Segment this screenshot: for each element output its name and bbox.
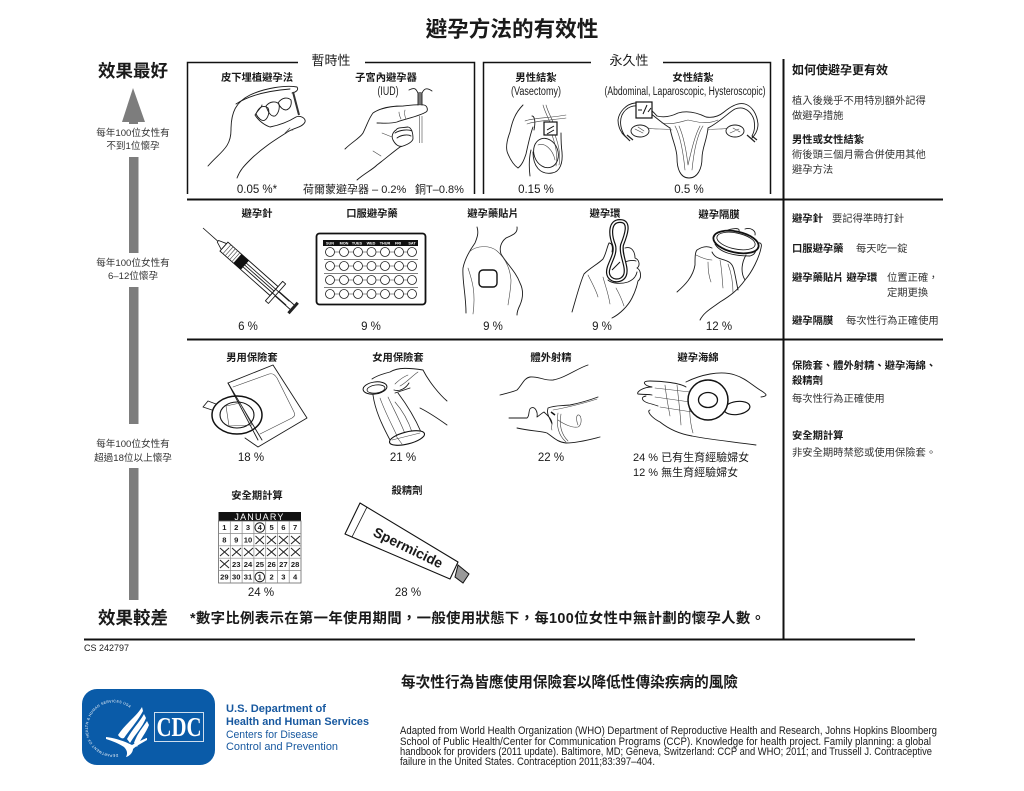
icon: hand holding vaginal ring <box>572 221 641 318</box>
method: fertility awareness: 安全期計算 <box>231 489 283 502</box>
icon: syringe <box>194 218 303 319</box>
advice: sterilization: 避孕方法 <box>792 163 833 176</box>
icon: male anatomy with cut vas <box>507 105 566 176</box>
advice: sterilization: 術後頭三個月需合併使用其他 <box>792 148 926 161</box>
advice: implant: 做避孕措施 <box>792 109 843 122</box>
method: implant <box>208 71 305 196</box>
message: condom use: 每次性行為皆應使用保險套以降低性傳染疾病的風險 <box>401 673 738 691</box>
method: male condom: 18 % <box>238 452 264 464</box>
icon: shoulder with patch <box>463 227 523 315</box>
rates: sponge parous and nulliparous: 12 % 無生育經驗婦女 <box>633 465 738 479</box>
advice: implant <box>792 94 926 122</box>
label: middle tier rate: 每年100位女性有 <box>96 257 170 269</box>
label: bottom tier rate: 每年100位女性有 <box>96 438 170 450</box>
method: spermicide: 殺精劑 <box>392 484 422 497</box>
calendar numbers: 4 <box>293 573 298 582</box>
calendar numbers: 10 <box>244 535 252 544</box>
advice: diaphragm <box>792 314 939 327</box>
icon: calendar <box>218 512 301 583</box>
icon: condom and wrapper <box>203 365 307 447</box>
footnote: *數字比例表示在第一年使用期間，一般使用狀態下，每100位女性中無計劃的懷孕人數。 <box>190 609 765 627</box>
rates: hormonal and copper IUD: 銅T–0.8% <box>415 182 464 196</box>
rates: sponge parous and nulliparous: 24 % 已有生育經驗婦女 <box>633 450 749 464</box>
heading: permanent: 永久性 <box>609 53 649 68</box>
advice: injection <box>792 212 904 225</box>
method: withdrawal: 22 % <box>538 452 564 464</box>
advice: sterilization <box>792 133 926 176</box>
icon: pill pack: FRI <box>395 242 401 246</box>
method: tubal sterilization: (Abdominal, Laparoscopic, Hysteroscopic) <box>604 86 766 98</box>
method: diaphragm: 12 % <box>706 321 732 333</box>
label: top tier rate <box>96 127 170 152</box>
source citation: failure in the United States. Contraception 2011;83:397–404. <box>400 756 655 768</box>
icon: hand holding IUD <box>345 89 432 180</box>
panel frame lines <box>84 59 943 640</box>
method: vasectomy: 0.15 % <box>518 184 554 196</box>
method: implant: 0.05 %* <box>237 184 278 196</box>
icon: spermicide tube: Spermicide <box>371 524 446 571</box>
calendar numbers: 1 <box>258 573 263 582</box>
calendar numbers: 1 <box>222 523 227 532</box>
calendar numbers: 6 <box>281 523 286 532</box>
method: diaphragm: 避孕隔膜 <box>698 208 740 221</box>
calendar numbers: 9 <box>234 535 238 544</box>
calendar numbers: 28 <box>291 560 299 569</box>
calendar numbers: 30 <box>232 573 240 582</box>
source citation: handbook for providers (2011 update). Baltimore, MD; Geneva, Switzerland: CCP and WHO; 2011; and Trussell J. Contraceptive <box>400 746 932 758</box>
icon: withdrawal diagram <box>500 365 600 443</box>
advice: pill: 每天吃一錠 <box>856 242 907 255</box>
source citation: Adapted from World Health Organization (WHO) Department of Reproductive Health and Research, Johns Hopkins Bloomberg <box>400 725 937 737</box>
method: ring: 9 % <box>592 321 612 333</box>
method: tubal sterilization <box>604 71 766 196</box>
advice: patch and ring: 定期更換 <box>887 286 928 299</box>
advice: patch and ring: 避孕藥貼片 避孕環 <box>792 271 878 284</box>
advice: pill: 口服避孕藥 <box>792 242 843 255</box>
calendar numbers: 3 <box>246 523 250 532</box>
calendar numbers: 27 <box>279 560 288 569</box>
icon: hand holding sponge <box>638 373 766 445</box>
label: bottom tier rate: 超過18位以上懷孕 <box>94 452 172 464</box>
heading: temporary: 暫時性 <box>311 53 351 68</box>
calendar numbers: 23 <box>232 560 240 569</box>
agency name: Control and Prevention <box>226 741 338 753</box>
method: injection: 6 % <box>238 321 258 333</box>
method: withdrawal <box>500 351 600 464</box>
advice: patch and ring <box>792 271 938 299</box>
advice: barrier methods <box>792 359 936 405</box>
CDC box: CDC <box>156 712 202 742</box>
method: diaphragm <box>677 208 761 333</box>
icon: hand holding diaphragm <box>677 227 761 320</box>
method: ring <box>572 207 641 333</box>
advice: barrier methods: 保險套、體外射精、避孕海綿、 <box>792 359 936 372</box>
effectiveness scale <box>94 61 172 628</box>
icon: hand holding implant <box>208 86 305 178</box>
method: patch: 9 % <box>483 321 503 333</box>
method: ring: 避孕環 <box>590 207 621 220</box>
heading: 如何使避孕更有效 <box>792 62 888 77</box>
advice: fertility awareness: 安全期計算 <box>792 429 843 442</box>
arrow: effectiveness direction <box>122 88 145 600</box>
advice: implant: 植入後幾乎不用特別額外記得 <box>792 94 926 107</box>
icon: pill pack: SUN <box>326 242 334 246</box>
icon: hands holding female condom <box>362 368 447 448</box>
method: fertility awareness: 24 % <box>248 587 274 599</box>
calendar numbers: 24 <box>244 560 253 569</box>
heading: least effective: 效果較差 <box>98 608 168 628</box>
icon: uterus and tubes <box>618 102 758 178</box>
method: oral pill <box>316 207 426 333</box>
method: female condom: 21 % <box>390 452 416 464</box>
method: male condom <box>203 351 307 464</box>
calendar numbers <box>220 523 299 582</box>
panel: how to make contraception more effective <box>792 62 939 459</box>
heading: most effective: 效果最好 <box>98 61 168 81</box>
label: top tier rate: 不到1位懷孕 <box>106 140 160 152</box>
agency name: Health and Human Services <box>226 716 369 728</box>
calendar numbers: 3 <box>281 573 286 582</box>
label: middle tier rate <box>96 257 170 282</box>
method: female condom <box>362 351 447 464</box>
method: tubal sterilization: 0.5 % <box>674 184 704 196</box>
icon: pill pack: THUR <box>380 242 391 246</box>
label: top tier rate: 每年100位女性有 <box>96 127 170 139</box>
calendar numbers: 31 <box>244 573 253 582</box>
title: 避孕方法的有效性 <box>426 16 598 42</box>
method: IUD: (IUD) <box>378 86 399 98</box>
calendar numbers: 5 <box>269 523 274 532</box>
method: oral pill: 口服避孕藥 <box>346 207 398 220</box>
agency name: U.S. Department of <box>226 703 326 715</box>
advice: patch and ring: 位置正確， <box>887 271 938 284</box>
method: withdrawal: 體外射精 <box>530 351 572 364</box>
method: injection <box>194 207 303 333</box>
calendar numbers: 26 <box>267 560 276 569</box>
method: spermicide: 28 % <box>395 587 421 599</box>
calendar numbers: 25 <box>256 560 265 569</box>
advice: sterilization: 男性或女性結紮 <box>792 133 864 146</box>
advice: diaphragm: 每次性行為正確使用 <box>846 314 939 327</box>
logo: CDC <box>82 689 215 765</box>
calendar numbers: 7 <box>293 523 297 532</box>
document code: CS 242797 <box>84 643 129 653</box>
source citation: School of Public Health/Center for Communication Programs (CCP). Knowledge for health project. Family planning: a global <box>400 736 931 748</box>
source citation <box>400 725 937 768</box>
advice: injection: 避孕針 <box>792 212 823 225</box>
advice: fertility awareness: 非安全期時禁慾或使用保險套。 <box>792 446 936 459</box>
method: vasectomy: (Vasectomy) <box>511 86 561 98</box>
calendar numbers: 2 <box>234 523 238 532</box>
calendar numbers: 29 <box>220 573 229 582</box>
rates: hormonal and copper IUD <box>303 182 464 196</box>
icon: eagle <box>106 707 149 757</box>
agency name <box>226 703 369 753</box>
icon: pill pack <box>316 234 426 304</box>
method: patch <box>463 207 523 333</box>
icon: pill pack: TUES <box>352 242 363 246</box>
advice: fertility awareness <box>792 429 936 459</box>
label: bottom tier rate <box>94 438 172 464</box>
icon: pill pack: MON <box>340 242 349 246</box>
method: IUD: 子宮內避孕器 <box>355 71 418 84</box>
method: vasectomy <box>507 71 566 196</box>
label: middle tier rate: 6–12位懷孕 <box>108 270 158 282</box>
agency name: Centers for Disease <box>226 729 318 741</box>
method: fertility awareness <box>218 489 301 599</box>
method: injection: 避孕針 <box>242 207 272 220</box>
icon: pill pack: WED <box>367 242 376 246</box>
method: patch: 避孕藥貼片 <box>467 207 519 220</box>
method: IUD <box>303 71 464 196</box>
calendar numbers: 8 <box>222 535 227 544</box>
rates: hormonal and copper IUD: 荷爾蒙避孕器 – 0.2% <box>303 182 407 196</box>
method: spermicide <box>345 484 469 599</box>
icon: calendar: JANUARY <box>234 512 285 522</box>
method: tubal sterilization: 女性結紮 <box>672 71 714 84</box>
advice: barrier methods: 殺精劑 <box>792 374 823 387</box>
method: female condom: 女用保險套 <box>372 351 424 364</box>
calendar numbers: 4 <box>258 523 263 532</box>
rates: sponge parous and nulliparous <box>633 450 749 479</box>
seal text: DEPARTMENT OF HEALTH & HUMAN SERVICES USA <box>85 700 130 757</box>
advice: barrier methods: 每次性行為正確使用 <box>792 392 885 405</box>
method: oral pill: 9 % <box>361 321 381 333</box>
method: sponge: 避孕海綿 <box>677 351 719 364</box>
advice: injection: 要記得準時打針 <box>832 212 904 225</box>
method: male condom: 男用保險套 <box>226 351 278 364</box>
method: implant: 皮下埋植避孕法 <box>221 71 293 84</box>
calendar numbers: 2 <box>269 573 274 582</box>
method: vasectomy: 男性結紮 <box>515 71 557 84</box>
icon: pill pack: SAT <box>408 242 416 246</box>
method: sponge <box>633 351 766 479</box>
advice: diaphragm: 避孕隔膜 <box>792 314 834 327</box>
advice: pill <box>792 242 907 255</box>
